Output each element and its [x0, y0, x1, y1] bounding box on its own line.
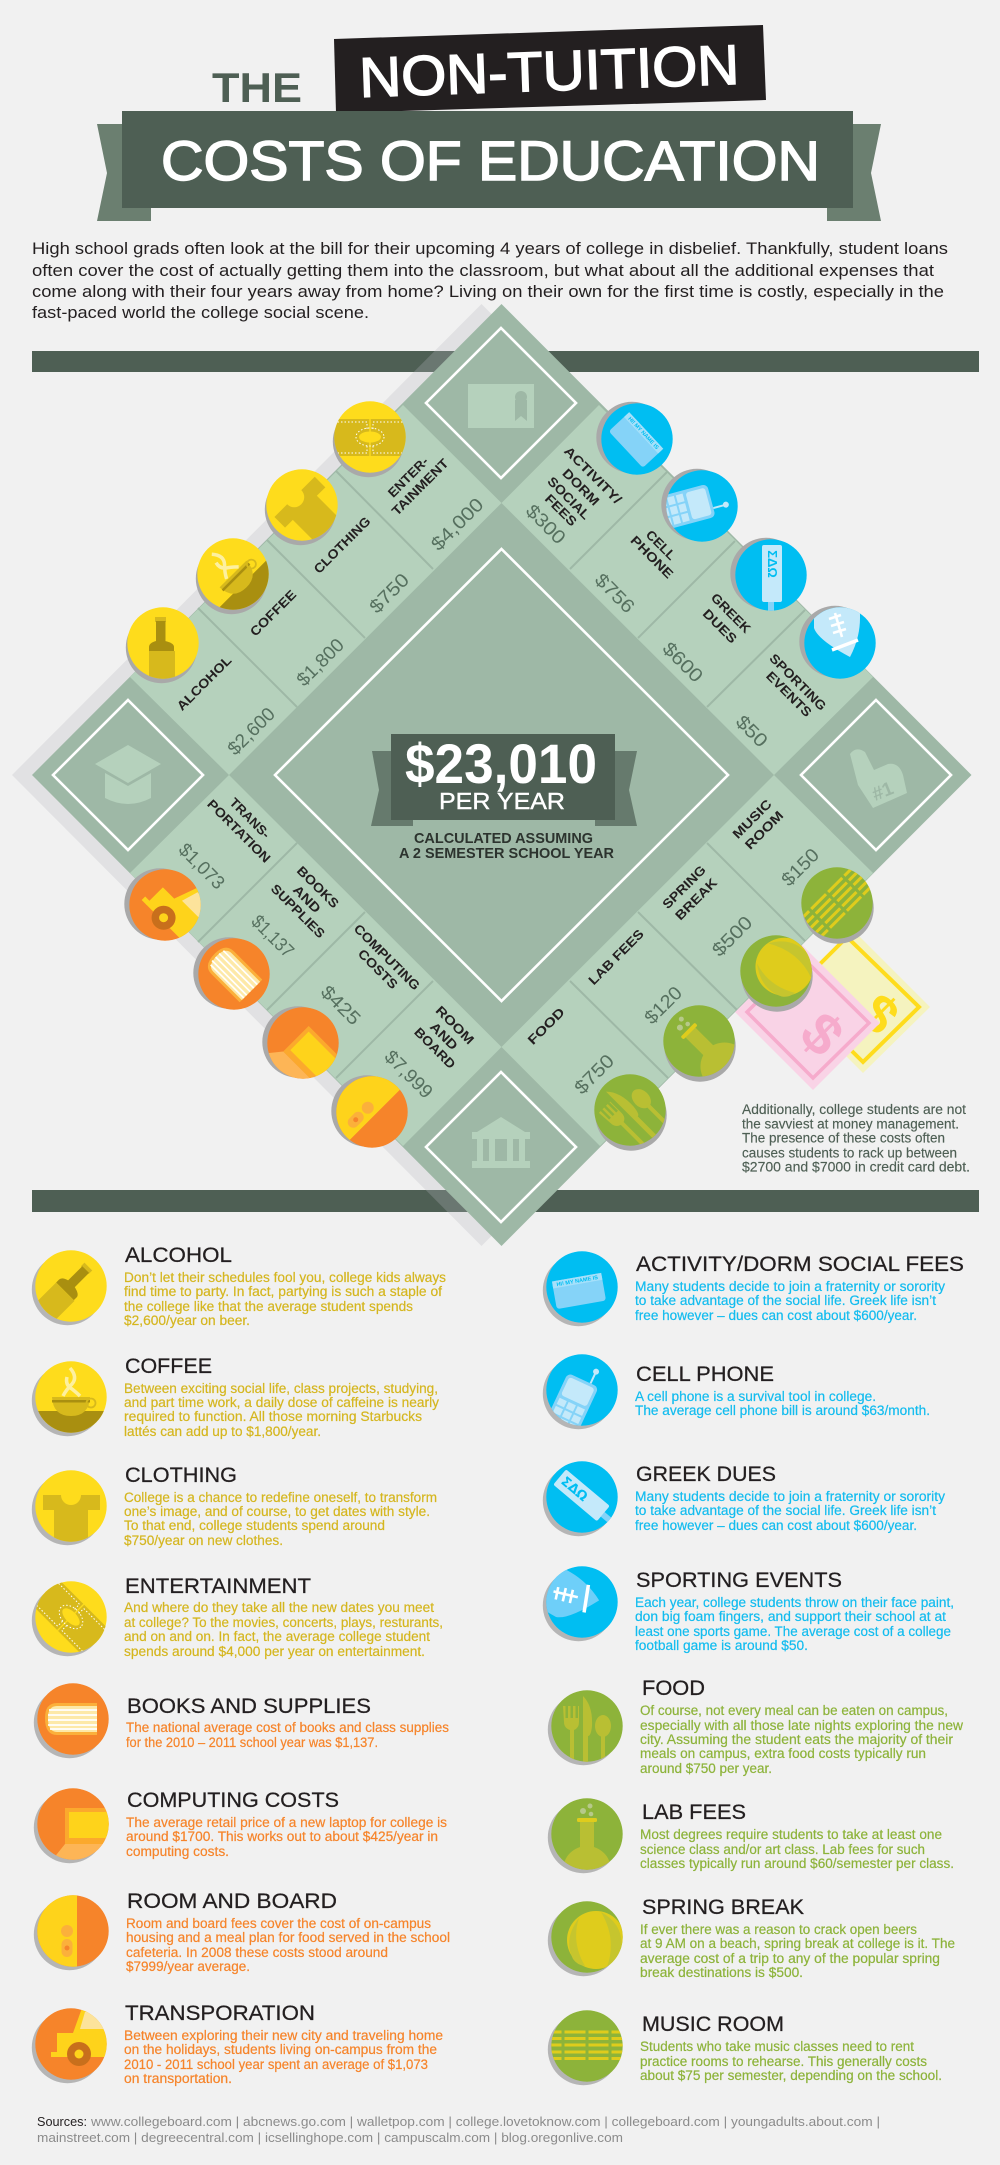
board icon: sheet music: [801, 867, 874, 944]
body: transporation: Between exploring their new city and traveling home: [124, 2028, 443, 2043]
body: music room: practice rooms to rehearse. This generally costs: [640, 2054, 927, 2069]
cell: food: FOOD: [524, 1004, 568, 1048]
cell: alcohol: [174, 653, 280, 760]
list: transportation: [32, 2002, 443, 2086]
board icon: greek paddle: [730, 538, 807, 614]
body: greek dues: [635, 1489, 945, 1533]
body: alcohol: the college like that the average student spends: [124, 1299, 413, 1314]
body: coffee: and part time work, a daily dose of caffeine is nearly: [124, 1395, 439, 1410]
board icon: t-shirt: [264, 469, 338, 546]
body: transporation: 2010 - 2011 school year spent an average of $1,073: [124, 2057, 428, 2072]
body: spring break: at 9 AM on a beach, spring break at college is it. The: [640, 1936, 955, 1951]
cell: activity dorm social fees: ACTIVITY/: [561, 443, 625, 507]
body: cell phone: [635, 1389, 930, 1418]
heading: cell phone: CELL PHONE: [636, 1363, 774, 1386]
cell: lab fees: LAB FEES: [585, 926, 647, 988]
body: spring break: break destinations is $500.: [640, 1965, 803, 1980]
intro text: High school grads often look at the bill for their upcoming 4 years of college in disbelief. Thankfully, student loans: [32, 240, 948, 258]
body: entertainment: and on and on. In fact, the average college student: [124, 1629, 430, 1644]
board icon: flask: [663, 1005, 736, 1082]
icon: football: [534, 1565, 618, 1641]
body: lab fees: classes typically run around $60/semester per class.: [640, 1856, 954, 1871]
credit card bills: [735, 932, 930, 1090]
intro text: often cover the cost of actually getting them into the classroom, but what about all the additional expenses that: [32, 262, 934, 280]
body: food: around $750 per year.: [640, 1761, 772, 1776]
body: transporation: on transportation.: [124, 2071, 232, 2086]
cell: spring break: $500: [708, 912, 757, 961]
body: food: Of course, not every meal can be eaten on campus,: [640, 1703, 948, 1718]
board icon: book: [193, 937, 270, 1010]
board base diamond: [32, 304, 972, 1246]
total banner: [371, 732, 637, 826]
bill: yellow: [788, 932, 930, 1073]
body: alcohol: Don’t let their schedules fool you, college kids always: [124, 1270, 446, 1285]
cell: transportation: TRANS-: [227, 795, 273, 841]
body: clothing: $750/year on new clothes.: [124, 1533, 283, 1548]
body: entertainment: [124, 1600, 443, 1659]
band: top right cells: [502, 405, 873, 775]
cell: spring break: [659, 862, 757, 961]
cell: music room: $150: [778, 845, 824, 891]
icon: stadium: [32, 1581, 107, 1656]
body: sporting events: least one sports game. The average cost of a college: [635, 1624, 951, 1639]
cell: room and board: ROOM: [433, 1003, 477, 1047]
board icon: bed: [331, 1075, 408, 1148]
sources: Sources:: [37, 2114, 87, 2129]
cell: food: [524, 1004, 619, 1099]
credit card note: the savviest at money management.: [742, 1116, 959, 1131]
board icon: greek paddle: ΣΔΩ: [765, 550, 780, 578]
body: clothing: one’s image, and of course, to get dates with style.: [124, 1504, 430, 1519]
cell: food: $750: [571, 1051, 619, 1099]
cell: entertainment: TAINMENT: [389, 456, 452, 519]
heading: alcohol: ALCOHOL: [125, 1244, 232, 1267]
total note: [399, 830, 614, 862]
body: music room: [640, 2039, 942, 2083]
cell: coffee: $1,800: [293, 635, 349, 691]
body: computing costs: around $1700. This works out to about $425/year in: [126, 1829, 438, 1844]
cell: spring break: BREAK: [672, 875, 721, 923]
heading: music room: MUSIC ROOM: [642, 2013, 784, 2036]
body: activity dorm social fees: Many students decide to join a fraternity or sorority: [635, 1279, 945, 1294]
icon: beach ball: [548, 1901, 625, 1976]
credit card note: causes students to rack up between: [742, 1145, 957, 1160]
per year: PER YEAR: [439, 788, 565, 814]
board icon: stadium: [330, 401, 410, 477]
body: computing costs: computing costs.: [126, 1844, 229, 1859]
cell: activity dorm social fees: DORM: [559, 465, 603, 509]
body: music room: about $75 per semester, depending on the school.: [640, 2068, 942, 2083]
body: room and board: Room and board fees cover the cost of on-campus: [126, 1916, 431, 1931]
corner: graduation cap: [53, 700, 203, 850]
body: spring break: [640, 1922, 955, 1980]
icon: name tag: HI! MY NAME IS: [556, 1275, 599, 1288]
icon: cutlery: [548, 1690, 623, 1766]
cell: greek dues: $600: [658, 638, 707, 687]
body: activity dorm social fees: free however – dues can cost about $600/year.: [635, 1308, 917, 1323]
cell: coffee: COFFEE: [247, 587, 299, 639]
list: spring break: [548, 1896, 955, 1980]
body: coffee: lattés can add up to $1,800/year.: [124, 1424, 321, 1439]
title label: NON-TUITION: NON-TUITION: [358, 33, 740, 109]
icon: greek paddle: [543, 1461, 619, 1536]
cell: computing costs: COMPUTING: [351, 921, 423, 993]
cell: clothing: $750: [366, 570, 414, 618]
cell: books and supplies: BOOKS: [294, 863, 342, 911]
cell: music room: ROOM: [742, 808, 786, 852]
list: lab fees: [548, 1798, 954, 1894]
body: cell phone: The average cell phone bill is around $63/month.: [635, 1403, 930, 1418]
board icon: cell phone: [661, 468, 738, 542]
cell: transportation: PORTATION: [204, 796, 274, 866]
icon: truck: [32, 2008, 111, 2083]
body: sporting events: don big foam fingers, and support their school at at: [635, 1609, 946, 1624]
cell: cell phone: PHONE: [628, 533, 677, 582]
corner: foam finger: #1: [869, 778, 897, 806]
body: clothing: College is a chance to redefine oneself, to transform: [124, 1490, 437, 1505]
list: cell phone: [542, 1354, 929, 1430]
heading: sporting events: SPORTING EVENTS: [636, 1569, 842, 1592]
heading: spring break: SPRING BREAK: [642, 1896, 804, 1919]
icon: name tag: [543, 1251, 618, 1326]
body: activity dorm social fees: to take advantage of the social life. Greek life isn’t: [635, 1293, 936, 1308]
body: coffee: required to function. All those morning Starbucks: [124, 1409, 422, 1424]
band: bottom left cells: [130, 775, 502, 1146]
board icon: coffee: [196, 538, 269, 614]
cell: books and supplies: [247, 863, 342, 962]
body: activity dorm social fees: [635, 1279, 945, 1323]
credit card note: Additionally, college students are not: [742, 1102, 966, 1117]
heading: transporation: TRANSPORATION: [125, 2002, 315, 2025]
cell: books and supplies: AND: [290, 882, 324, 916]
cell: alcohol: ALCOHOL: [174, 653, 234, 713]
body: clothing: To that end, college students spend around: [124, 1518, 385, 1533]
cell: greek dues: GREEK: [708, 590, 754, 636]
list: activity dorm social fees: [543, 1251, 964, 1326]
list: clothing: [32, 1464, 437, 1548]
body: spring break: If ever there was a reason to crack open beers: [640, 1922, 917, 1937]
heading: coffee: COFFEE: [125, 1355, 212, 1378]
corner: diploma: [426, 328, 576, 478]
cell: alcohol: $2,600: [224, 704, 280, 760]
intro text: fast-paced world the college social scene.: [32, 304, 369, 322]
icon: cell phone: [542, 1354, 618, 1430]
body: transporation: [124, 2028, 443, 2086]
body: entertainment: And where do they take all the new dates you meet: [124, 1600, 434, 1615]
board icon: cutlery: [594, 1074, 667, 1151]
cell: spring break: SPRING: [659, 862, 709, 912]
cell: sporting events: $50: [731, 712, 771, 752]
total note: A 2 SEMESTER SCHOOL YEAR: [399, 845, 614, 862]
body: sporting events: Each year, college students throw on their face paint,: [635, 1595, 954, 1610]
credit card note: The presence of these costs often: [742, 1131, 945, 1146]
cell: room and board: BOARD: [411, 1024, 459, 1072]
icon: coffee cup: [32, 1361, 107, 1436]
body: cell phone: A cell phone is a survival tool in college.: [635, 1389, 876, 1404]
heading: entertainment: ENTERTAINMENT: [125, 1575, 311, 1598]
cell: cell phone: CELL: [643, 527, 679, 563]
list: alcohol: [32, 1244, 446, 1328]
board icon: laptop: [262, 1006, 339, 1079]
board icon: beach ball: [740, 935, 813, 1012]
board icon: truck: [124, 868, 201, 941]
body: food: city. Assuming the student eats the majority of their: [640, 1732, 954, 1747]
heading: lab fees: LAB FEES: [642, 1801, 746, 1824]
body: computing costs: [126, 1815, 447, 1859]
cell: transportation: [174, 795, 274, 894]
body: entertainment: at college? To the movies, concerts, plays, resturants,: [124, 1615, 443, 1630]
list: food: [548, 1677, 963, 1776]
cell: activity dorm social fees: SOCIAL: [545, 474, 593, 522]
band: bottom right cells: [502, 775, 873, 1146]
cell: greek dues: DUES: [700, 606, 740, 646]
cell: room and board: AND: [427, 1019, 461, 1053]
body: entertainment: spends around $4,000 per year on entertainment.: [124, 1644, 425, 1659]
icon: t-shirt: [32, 1470, 107, 1546]
cell: books and supplies: $1,137: [247, 911, 298, 962]
list: books and supplies: [34, 1683, 449, 1758]
cell: computing costs: COSTS: [355, 946, 401, 992]
icon: bottle: [32, 1250, 107, 1325]
cell: activity dorm social fees: FEES: [542, 491, 580, 529]
list: coffee: [31, 1355, 439, 1441]
cell: coffee: [247, 587, 349, 691]
cell: entertainment: [385, 454, 488, 555]
board icon: name tag: HI! MY NAME IS: [626, 416, 660, 451]
heading: books and supplies: BOOKS AND SUPPLIES: [127, 1695, 371, 1718]
total amount: $23,010: [405, 732, 597, 795]
sources: [37, 2114, 880, 2145]
cell: sporting events: EVENTS: [763, 668, 815, 720]
body: sporting events: [635, 1595, 954, 1653]
cell: entertainment: ENTER-: [385, 454, 431, 500]
body: transporation: on the holidays, students living on-campus from the: [124, 2042, 437, 2057]
heading: activity dorm social fees: ACTIVITY/DORM SOCIAL FEES: [636, 1253, 964, 1276]
icon: greek paddle: ΣΔΩ: [558, 1474, 590, 1505]
body: food: especially with all those late nights exploring the new: [640, 1718, 963, 1733]
heading: greek dues: GREEK DUES: [636, 1463, 776, 1486]
body: alcohol: find time to party. In fact, partying is such a staple of: [124, 1284, 442, 1299]
cell: greek dues: [658, 590, 754, 687]
body: spring break: average cost of a trip to any of the popular spring: [640, 1951, 940, 1966]
body: alcohol: [124, 1270, 446, 1328]
cell: room and board: [380, 1003, 477, 1103]
cell: computing costs: [316, 921, 423, 1030]
bill: pink: [735, 945, 880, 1090]
list: computing costs: [34, 1788, 447, 1864]
cell: sporting events: SPORTING: [766, 651, 829, 714]
icon: laptop: [34, 1788, 115, 1864]
cell: lab fees: $120: [641, 983, 687, 1029]
cell: music room: MUSIC: [729, 796, 775, 842]
body: computing costs: The average retail price of a new laptop for college is: [126, 1815, 447, 1830]
cell: cell phone: $756: [590, 570, 638, 618]
cell: clothing: [311, 514, 414, 618]
list: entertainment: [29, 1575, 443, 1659]
body: lab fees: [640, 1827, 954, 1871]
list: room and board: [33, 1890, 450, 1974]
list: music room: [547, 2010, 942, 2085]
sources: mainstreet.com | degreecentral.com | icsellinghope.com | campuscalm.com | blog.oregonlive.com: [37, 2130, 623, 2145]
sources: www.collegeboard.com | abcnews.go.com | walletpop.com | college.lovetoknow.com | collegeboard.com | youngadults.about.com |: [90, 2114, 880, 2129]
icon: sheet music: [547, 2010, 627, 2085]
list: greek dues: [543, 1461, 945, 1536]
body: coffee: Between exciting social life, class projects, studying,: [124, 1381, 438, 1396]
board icon: football: [799, 603, 876, 679]
body: room and board: [126, 1916, 450, 1974]
bill: pink: $: [787, 1000, 856, 1069]
body: clothing: [124, 1490, 437, 1548]
body: books and supplies: [126, 1720, 449, 1750]
intro text: [32, 240, 948, 322]
body: sporting events: football game is around $50.: [635, 1638, 808, 1653]
heading: clothing: CLOTHING: [125, 1464, 237, 1487]
title banner: costs of education: COSTS OF EDUCATION: [161, 129, 820, 192]
cell: room and board: $7,999: [380, 1047, 436, 1103]
icon: flask: [548, 1798, 623, 1894]
body: food: [640, 1703, 963, 1776]
cell: cell phone: [590, 527, 679, 618]
board icon: name tag: [596, 402, 673, 475]
body: lab fees: science class and/or art class. Lab fees for such: [640, 1842, 925, 1857]
cell: sporting events: [731, 651, 829, 752]
body: food: meals on campus, extra food costs typically run: [640, 1746, 926, 1761]
body: greek dues: to take advantage of the social life. Greek life isn’t: [635, 1503, 936, 1518]
credit card note: $2700 and $7000 in credit card debt.: [742, 1160, 970, 1175]
cell: entertainment: $4,000: [427, 494, 488, 555]
board icon: alcohol: [126, 607, 199, 683]
body: music room: Students who take music classes need to rent: [640, 2039, 914, 2054]
total note: CALCULATED ASSUMING: [414, 830, 593, 847]
body: lab fees: Most degrees require students to take at least one: [640, 1827, 942, 1842]
icon: book: [34, 1683, 109, 1758]
body: greek dues: free however – dues can cost about $600/year.: [635, 1518, 917, 1533]
corner: campus building: [426, 1072, 576, 1222]
body: greek dues: Many students decide to join a fraternity or sorority: [635, 1489, 945, 1504]
list: sporting events: [534, 1565, 954, 1653]
cell: books and supplies: SUPPLIES: [268, 881, 328, 941]
cell: activity dorm social fees: $300: [521, 501, 569, 549]
body: room and board: housing and a meal plan for food served in the school: [126, 1930, 450, 1945]
board: [32, 304, 972, 1246]
cell: activity dorm social fees: [521, 443, 625, 549]
corner: foam finger: [801, 700, 951, 850]
body: alcohol: $2,600/year on beer.: [124, 1313, 250, 1328]
heading: room and board: ROOM AND BOARD: [127, 1890, 337, 1913]
body: room and board: $7999/year average.: [126, 1959, 250, 1974]
intro text: come along with their four years away from home? Living on their own for the first time is costly, especially in the: [32, 283, 944, 301]
heading: computing costs: COMPUTING COSTS: [127, 1789, 339, 1812]
cell: clothing: CLOTHING: [311, 514, 374, 577]
cell: transportation: $1,073: [174, 840, 228, 894]
cell: computing costs: $425: [316, 982, 364, 1030]
band: top left cells: [130, 405, 502, 775]
body: books and supplies: for the 2010 – 2011 school year was $1,137.: [126, 1735, 378, 1750]
title banner: costs of education: [97, 111, 881, 221]
heading: food: FOOD: [642, 1677, 705, 1700]
body: books and supplies: The national average cost of books and class supplies: [126, 1720, 449, 1735]
body: coffee: [124, 1381, 439, 1439]
body: room and board: cafeteria. In 2008 these costs stood around: [126, 1945, 388, 1960]
board shadow: [12, 304, 952, 1246]
cell: lab fees: [585, 926, 687, 1029]
center frame: [275, 549, 728, 1001]
bill: yellow: $: [847, 982, 911, 1046]
cell: music room: [729, 796, 824, 891]
title word: THE: THE: [212, 64, 302, 111]
title: [97, 25, 881, 221]
icon: bed: [33, 1891, 109, 1971]
credit card note: [742, 1102, 970, 1175]
